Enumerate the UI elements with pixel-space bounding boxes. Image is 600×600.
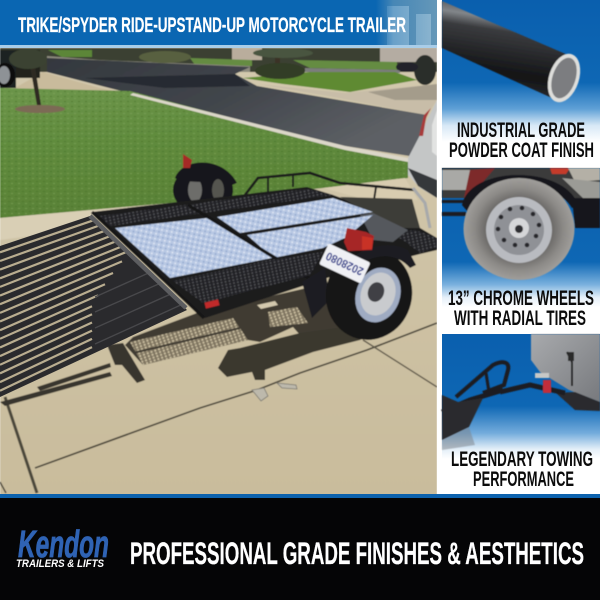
upper-right sidewalk behind rail: [323, 178, 418, 200]
trailer front wheel and fender: [173, 154, 237, 214]
tail light: [344, 228, 374, 251]
black background: [0, 498, 600, 600]
curb: [130, 93, 408, 162]
near sidewalk at left: [0, 72, 133, 94]
concrete joints and cracks: [0, 323, 437, 493]
rear frame tube and crossbar: [92, 205, 312, 318]
logo: Kendon: [16, 524, 109, 570]
diamond plate lower right: [247, 215, 373, 258]
panel: powder coat finish: [442, 0, 600, 165]
banner fill: [0, 0, 437, 45]
footer band: [0, 494, 600, 600]
dark body panel: [360, 213, 408, 242]
logo: Kendon: TRAILERS & LIFTS: [16, 558, 105, 570]
right sidewalk: [257, 84, 437, 115]
trailer rear wheel: [316, 239, 422, 349]
icon: hitch and car photo: [442, 334, 600, 450]
towing car: [408, 100, 437, 198]
ramp shadows on ground: [0, 343, 145, 406]
license plate: [319, 243, 370, 284]
road: [47, 58, 427, 157]
side rail: [245, 173, 415, 200]
background view through rear frame: [340, 197, 420, 228]
panel: chrome wheels: [442, 168, 600, 330]
mesh shadow patch right: [268, 307, 308, 327]
diamond plate upper right: [217, 198, 373, 233]
building behind banner: [375, 0, 437, 48]
small tree: [9, 49, 65, 113]
banner underline: [0, 45, 437, 48]
panel: main trailer photo: [0, 45, 437, 495]
ramp bar highlights in shaded section: [95, 274, 180, 344]
title banner: [0, 0, 437, 48]
trailer shadow dark band: [125, 285, 345, 365]
front mesh strip: [173, 252, 323, 303]
shrub island: [253, 48, 313, 79]
ramp body of dark bars: [0, 216, 187, 397]
straps on ground: [252, 383, 297, 401]
left sidewalk strip: [0, 203, 170, 240]
right island lawn: [243, 72, 417, 92]
logo: Kendon: Kendon: [18, 524, 109, 566]
icon: trailer wheel photo: [442, 168, 600, 280]
lawn: [0, 88, 408, 218]
background strip of dark trees and buildings: [0, 48, 437, 85]
white divider column: [437, 0, 442, 495]
mesh shadow patch left: [130, 318, 248, 365]
caption: [448, 286, 594, 330]
deck frame: [92, 187, 437, 318]
parked car at left: [0, 50, 40, 88]
right mesh deck: [390, 230, 437, 253]
lawn texture: [0, 88, 408, 218]
blue strip: [0, 494, 600, 498]
rear fender: [345, 245, 416, 272]
red side reflector: [204, 299, 220, 309]
ramp gaps showing concrete between bars: [0, 221, 126, 391]
caption: [449, 118, 594, 162]
icon: black tube: [442, 1, 586, 106]
rear mesh strip: [100, 189, 333, 226]
small bright gaps in shadow: [257, 301, 278, 309]
caption: [451, 447, 593, 491]
diamond plate left: [115, 218, 272, 278]
wheel shadow: [218, 328, 377, 380]
panel: towing performance: [442, 334, 600, 494]
license plate: 2028080: [324, 249, 366, 277]
tow frame chrome: [413, 188, 430, 228]
axle bracket: [302, 268, 330, 318]
ramp hinge band: [90, 216, 186, 308]
loading ramp with bars: [0, 216, 187, 397]
